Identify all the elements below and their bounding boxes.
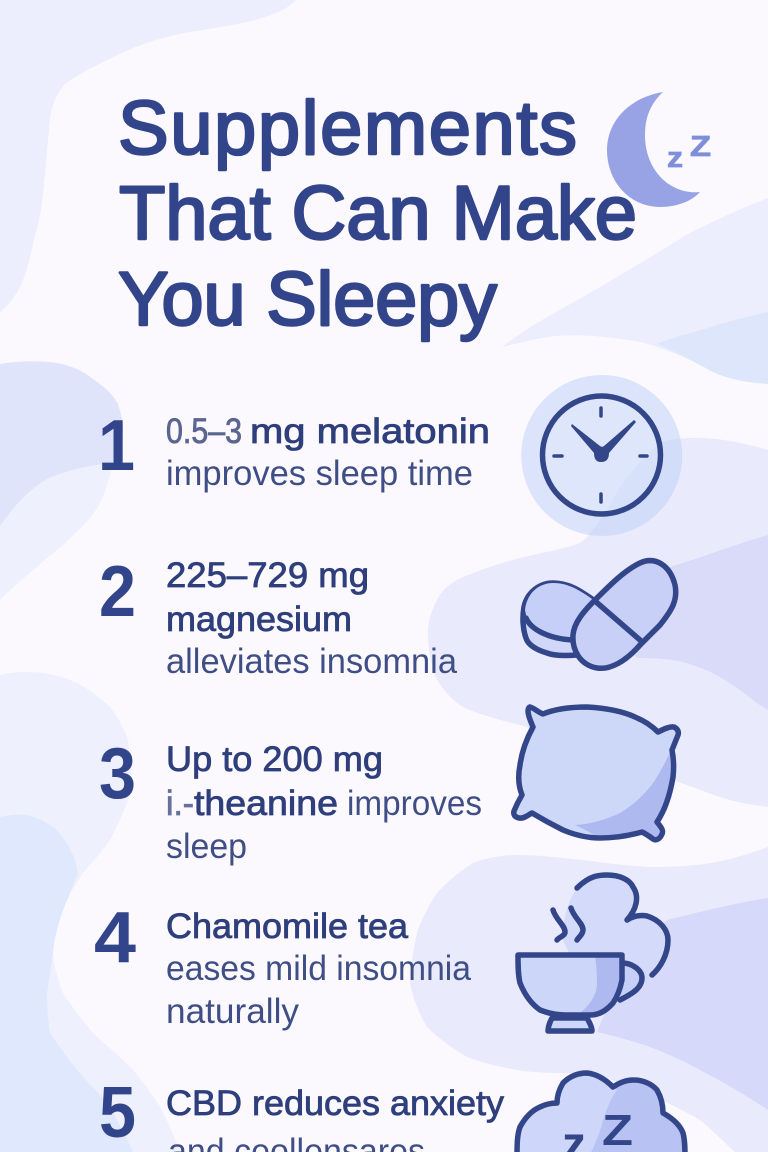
- item 5: CBD: CBD reduces anxiety: [166, 1084, 505, 1123]
- item 1: melatonin: 0.5–3: [166, 412, 242, 451]
- title: You Sleepy: [118, 257, 497, 342]
- item 1: melatonin: improves sleep time: [166, 454, 473, 493]
- icon: sleeping cloud: [517, 1073, 685, 1152]
- icon: crescent moon with z's: z: [667, 142, 683, 174]
- item 2: magnesium: [99, 552, 458, 681]
- item 2: magnesium: magnesium: [166, 600, 352, 639]
- item 5: CBD: [99, 1073, 505, 1152]
- item 3: L-theanine: [99, 734, 482, 866]
- icon: tea cup with steam cloud: [518, 875, 668, 1031]
- item 3: L-theanine: improves: [347, 784, 482, 823]
- item 3: L-theanine: Up to 200 mg: [166, 740, 383, 779]
- item 2: magnesium: 2: [99, 552, 136, 632]
- icon: clock: [521, 375, 682, 536]
- item 1: melatonin: 1: [98, 406, 135, 486]
- icon: crescent moon with z's: [607, 92, 711, 207]
- icon: pillow: [514, 707, 678, 840]
- item 4: chamomile tea: [94, 898, 472, 1031]
- icon: crescent moon with z's: Z: [690, 131, 711, 163]
- title: Supplements: [118, 86, 577, 171]
- item 3: L-theanine: i.-: [166, 784, 194, 823]
- item 5: CBD: 5: [99, 1073, 136, 1152]
- item 2: magnesium: alleviates insomnia: [166, 642, 458, 681]
- item 2: magnesium: 225–729 mg: [166, 556, 369, 595]
- item 3: L-theanine: theanine: [194, 784, 338, 823]
- item 4: chamomile tea: eases mild insomnia: [166, 949, 472, 988]
- item 3: L-theanine: sleep: [166, 827, 247, 866]
- title: That Can Make: [119, 171, 637, 256]
- item 3: L-theanine: 3: [99, 734, 136, 814]
- title: [118, 86, 637, 342]
- item 1: melatonin: mg melatonin: [250, 412, 490, 451]
- item 4: chamomile tea: naturally: [166, 992, 299, 1031]
- icon: tablet and capsule: [523, 561, 676, 668]
- item 4: chamomile tea: Chamomile tea: [166, 907, 409, 946]
- item 1: melatonin: [98, 406, 490, 493]
- item 4: chamomile tea: 4: [94, 898, 136, 978]
